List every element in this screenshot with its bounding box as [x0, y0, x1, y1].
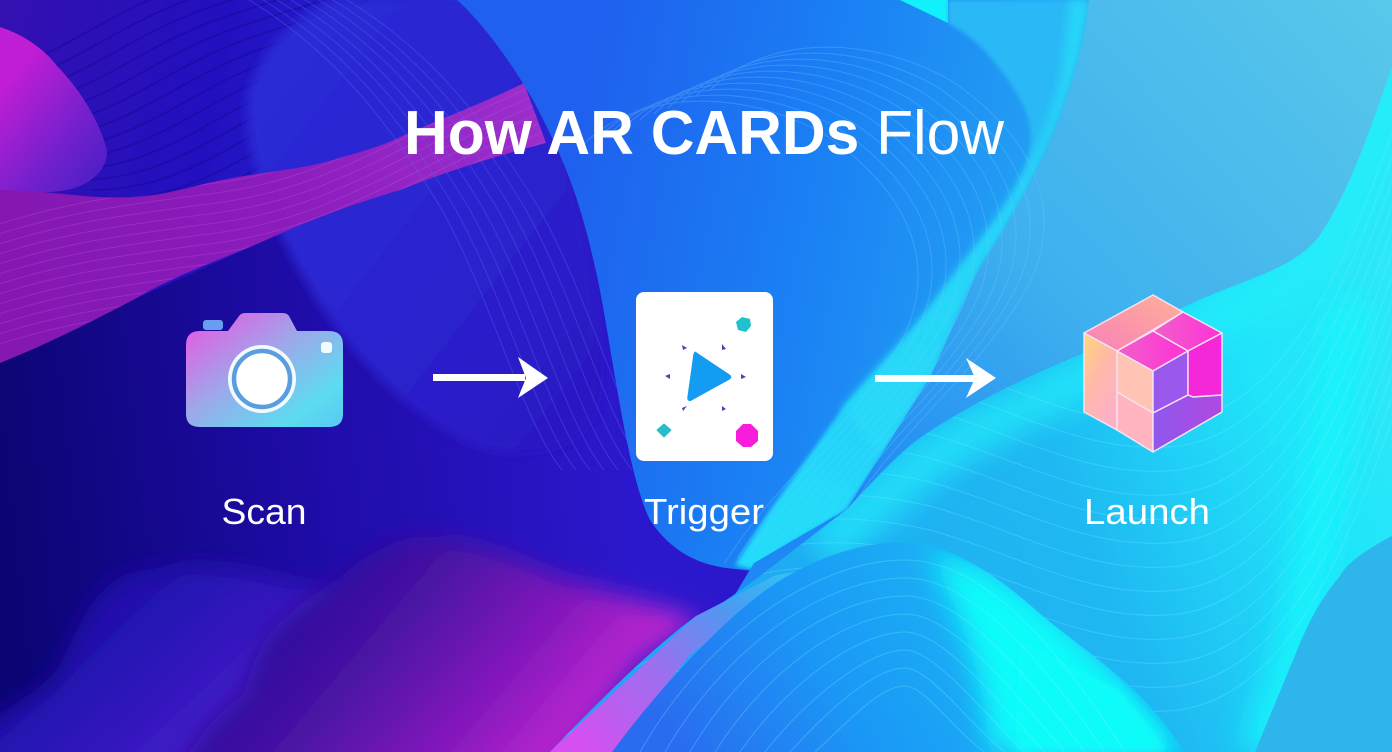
- arrow: trigger to launch: [875, 358, 996, 398]
- step: Trigger: [636, 292, 773, 532]
- background: central blue blob: [457, 0, 1100, 570]
- background: front wave: [612, 543, 1184, 752]
- arrow: scan to trigger: [433, 357, 548, 398]
- background: blob edge ribbon: [735, 0, 1089, 570]
- background: corner panel: [1255, 536, 1392, 752]
- icon: cube: [1084, 295, 1222, 452]
- step: Launch: [1084, 295, 1222, 532]
- label: Scan: Scan: [222, 491, 306, 532]
- background: cyan wave: [550, 67, 1392, 752]
- background: line textures: [0, 0, 1044, 564]
- label: Launch: Launch: [1084, 491, 1210, 532]
- icon: card with play: [636, 292, 773, 461]
- title: How AR CARDs Flow: [404, 99, 1004, 168]
- background: light blue panel: [640, 0, 1392, 752]
- step: Scan: [186, 313, 343, 532]
- label: Trigger: Trigger: [644, 491, 764, 532]
- icon: camera: [186, 313, 343, 427]
